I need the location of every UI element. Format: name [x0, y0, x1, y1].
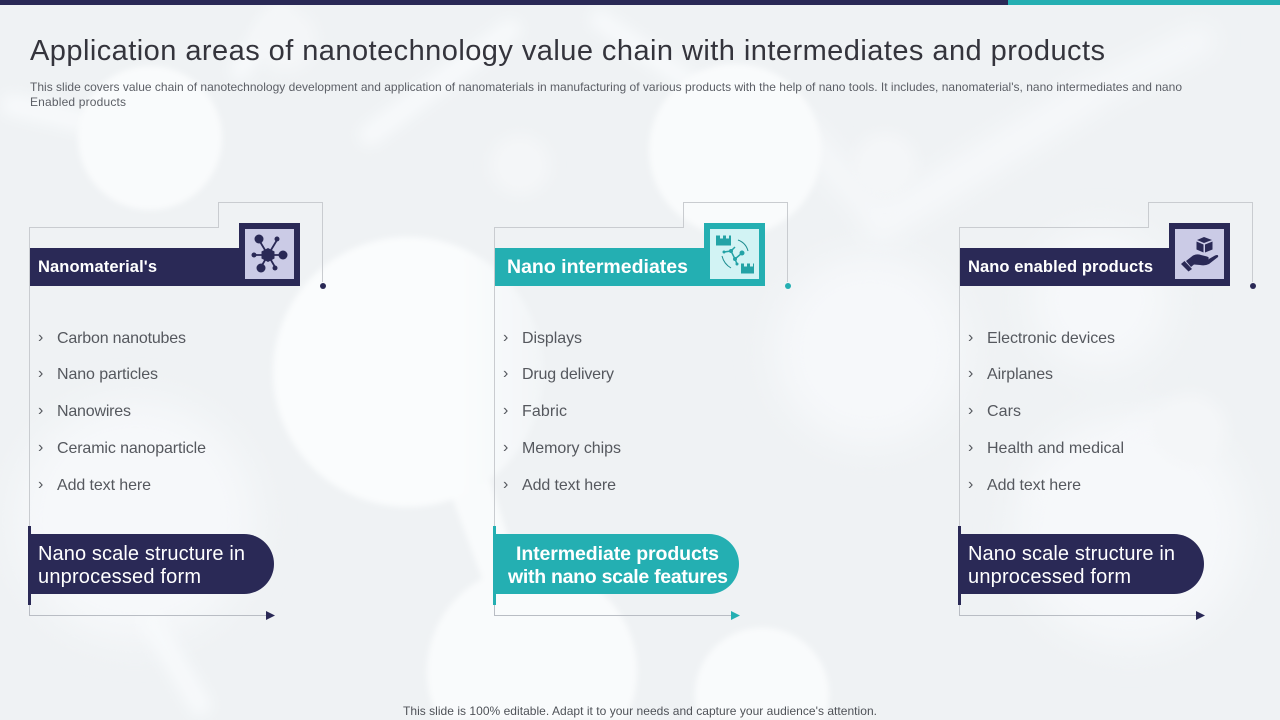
panel: nano enabled products — [958, 202, 1256, 620]
header band — [960, 223, 1230, 286]
list: › — [38, 329, 43, 346]
title: Application areas of nanotechnology value chain with intermediates and products — [30, 35, 1105, 67]
pill callout — [493, 526, 739, 605]
panel: nano intermediates — [493, 202, 791, 620]
footer note: This slide is 100% editable. Adapt it to your needs and capture your audience's attention. — [403, 704, 877, 718]
frame lines — [30, 202, 322, 526]
list — [968, 329, 1124, 494]
connector dot — [785, 283, 791, 289]
list: › — [968, 439, 973, 456]
list: › — [503, 476, 508, 493]
list: Add text here — [987, 477, 1081, 494]
list: › — [38, 476, 43, 493]
pill callout — [958, 526, 1204, 605]
list: Carbon nanotubes — [57, 330, 186, 347]
list: › — [968, 365, 973, 382]
panel: nanomaterials — [28, 202, 326, 620]
list: Nanowires — [57, 403, 131, 420]
heading: Nanomaterial's — [38, 258, 157, 276]
heading: Nano intermediates — [507, 256, 688, 278]
arrow — [30, 605, 275, 620]
list: Nano particles — [57, 366, 158, 383]
list: › — [503, 329, 508, 346]
list: Cars — [987, 403, 1021, 420]
subtitle: This slide covers value chain of nanotechnology development and application of nanomaterials in manufacturing of various products with the help of nano tools. It includes, nanomaterial's, nano intermediates and nano — [30, 80, 1182, 94]
top progress bar — [0, 0, 1280, 5]
list: Add text here — [522, 477, 616, 494]
pill callout: Nano scale structure in — [968, 543, 1175, 565]
connector dot — [320, 283, 326, 289]
frame lines — [494, 202, 788, 526]
list: › — [503, 439, 508, 456]
arrow — [960, 605, 1205, 620]
heading: Nano enabled products — [968, 258, 1153, 276]
list: Add text here — [57, 477, 151, 494]
pill callout: unprocessed form — [968, 566, 1131, 588]
list: Airplanes — [987, 366, 1053, 383]
icon: molecule network — [245, 229, 294, 279]
list: › — [38, 365, 43, 382]
list: › — [503, 365, 508, 382]
pill callout: Intermediate products — [516, 543, 719, 565]
list: › — [968, 402, 973, 419]
icon: exchange of materials — [710, 229, 759, 279]
header band — [495, 223, 765, 286]
list — [503, 329, 621, 494]
connector dot — [1250, 283, 1256, 289]
subtitle — [30, 80, 1182, 109]
list: Ceramic nanoparticle — [57, 440, 206, 457]
list: › — [38, 402, 43, 419]
list: Health and medical — [987, 440, 1124, 457]
list: Memory chips — [522, 440, 621, 457]
header band — [30, 223, 300, 286]
list: Displays — [522, 330, 582, 347]
list: › — [968, 476, 973, 493]
frame lines — [960, 202, 1252, 526]
pill callout: with nano scale features — [507, 566, 728, 588]
subtitle: Enabled products — [30, 95, 126, 109]
list: Drug delivery — [522, 366, 614, 383]
arrow — [494, 605, 740, 620]
pill callout — [28, 526, 274, 605]
icon: hand holding box — [1175, 229, 1224, 279]
list: › — [503, 402, 508, 419]
list — [38, 329, 206, 494]
list: › — [968, 329, 973, 346]
list: › — [38, 439, 43, 456]
list: Electronic devices — [987, 330, 1115, 347]
list: Fabric — [522, 403, 567, 420]
pill callout: unprocessed form — [38, 566, 201, 588]
pill callout: Nano scale structure in — [38, 543, 245, 565]
